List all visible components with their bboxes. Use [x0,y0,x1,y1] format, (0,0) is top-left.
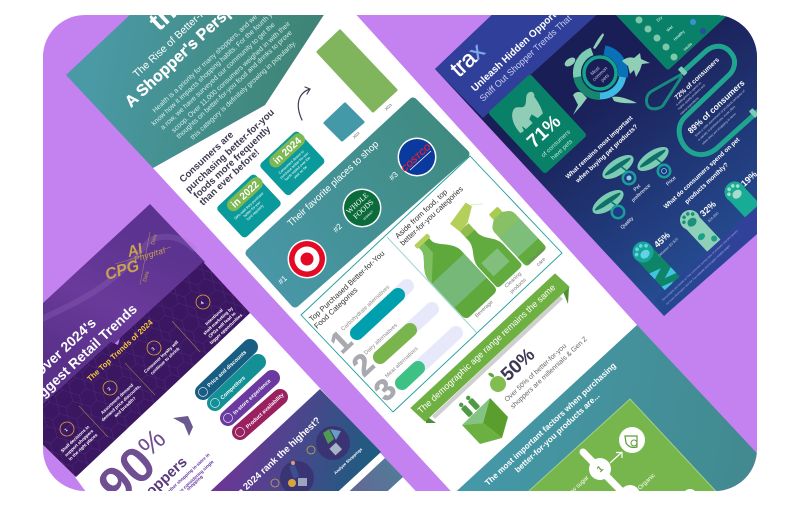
panel: favorite places to shop: #3 [387,169,400,182]
footer strip: Percentages are based on Trax consumer survey data of shoppers and pet owners [661,228,739,302]
trend 2: Assortment demand [100,382,134,415]
bar chart: purchase growth: 2023 [384,103,393,111]
trend 4: CPGs will lead to [207,311,237,339]
card: factor list: Organic [637,473,657,491]
collars: buying factors: preference [631,183,652,204]
trend 3: 3 [150,346,156,352]
leash with consumer stats: higher quality products and [677,83,706,111]
icon: teal paw 19 percent [720,177,777,236]
keyword cloud: Data [150,234,159,246]
icon: organic drop [619,427,645,453]
hero banner: scoop. Over 11,000 consumers weighed in with their [171,20,293,134]
pill list: key factors: Price and discounts [207,350,248,389]
icon: cube with people [458,394,508,444]
text: aside from food: Aside from food, top [393,188,449,240]
leash with consumer stats: when they are shopping in-store [701,112,737,146]
stat: 90 percent of shoppers [87,418,215,506]
card: in 2022: better-for-you [243,200,261,218]
keyword cloud: AI [124,240,145,261]
card: factor list: Low sugar [566,475,590,498]
keyword cloud: Data [142,271,151,283]
trend 4: shelf-marketing by [202,305,234,336]
keyword cloud: CPG [103,257,141,284]
keyword cloud [103,232,171,285]
card: in 2022: in 2022 [229,179,262,211]
keyword cloud: Phygital [133,246,167,264]
logo: Whole Foods: MARKET [362,209,374,221]
question: what matters most: What remains most important [565,114,635,180]
stat: 90 percent of shoppers: stores considering single [171,459,215,500]
trend 1: Shelf decisions in [60,424,91,453]
trend 2: and breadth? [113,395,137,418]
donut chart: most common pets [577,50,623,96]
top trends band [30,262,250,477]
card: 71 percent have pets: have pets [550,138,574,162]
leash with consumer stats: a variety of preferences, most often [697,105,736,142]
leash with consumer stats: natural ingredients [679,96,700,116]
hero banner: thoughts on better-for-you food and drinks to prove [176,29,294,140]
heading: consumers are purchasing: foods more frequently [192,124,274,201]
header banner: Sniff Out Shopper Trends That [478,13,574,103]
pill list: key factors: Competitors [220,375,247,401]
card: factor list [528,398,716,491]
panel: favorite places to shop: #2 [331,221,344,234]
panel: slate block [340,458,403,500]
hero banner [66,0,327,168]
card: in 2024: in 2024 [272,135,304,167]
hero banner: Health is a priority for many shoppers, and we [152,14,259,114]
hero banner: this category is definitely growing in popularity. [190,40,298,141]
logo: Whole Foods: WHOLE [344,190,371,216]
chart: top purchased food categories: 1 [324,324,359,360]
panel: shopper trends for pets [435,15,757,316]
logo: Target [288,240,326,278]
trend 2: 2 [106,386,112,392]
donut chart: most common pets: common [592,66,609,83]
stats: monthly spend values [652,169,759,258]
trend 4: bigger opportunities [209,312,244,345]
panel: ranked highest [201,389,381,500]
trend 2: demand price discounts, [100,383,142,422]
footer strip: for more information visit the Trax website and shopper insights pages [665,243,732,306]
header with keyword cloud: Over 2024's [31,314,99,379]
card: 71 percent have pets [492,78,583,170]
donut chart: most common pets: pets [600,73,611,84]
heading: consumers are purchasing: Consumers are [178,130,236,185]
card: in 2022: 59% said they purchase [234,191,264,221]
donut chart: most common pets: Most [589,65,602,77]
collars: buying factors: Price [665,175,678,187]
logo: Whole Foods [342,188,382,228]
stats: monthly spend values: 45% [652,230,672,250]
trend 4: Intentional [204,308,224,326]
panel: most important factors: The most important factors when purchasing [483,361,618,487]
card: top right green list [616,15,726,70]
stats: monthly spend values: 32% [698,199,718,219]
labels: category names: Personal [527,247,546,265]
trend 1 [60,422,99,462]
panel: top categories [301,156,562,412]
logo: Costco: COSTCO [399,141,433,174]
header banner: trax [445,37,490,82]
header banner [435,15,596,118]
icon: tiger paw 45 percent [628,237,686,297]
trend 1: 1 [63,427,69,433]
collars: buying factors: Pet [633,183,643,193]
collar: price [637,147,672,178]
trend 1: in the right places [68,432,99,462]
ribbon: demographic age range: The demographic age range remains the same [416,282,557,415]
top trends band: The Top Trends of 2024 [85,317,155,383]
panel: favorite places to shop [250,102,465,303]
stats: monthly spend values: 19% [739,169,759,189]
logo: Whole Foods: FOODS [351,197,375,221]
trend 3: continue to shrink [149,346,181,376]
leash with consumer stats [646,46,765,155]
stat: 50 percent: 50% [497,344,539,386]
chart: top purchased food categories: 3 [368,372,403,408]
text: aside from food: better-for-you categories [398,184,465,247]
chart: top purchased food categories: Top Purchased Better-for-You [307,249,386,323]
header with keyword cloud: Biggest Retail Trends [24,300,140,410]
heading: consumers are purchasing: purchasing better-for-you [184,107,277,195]
collar: pet preference [602,155,636,186]
leash with consumer stats: 72% of consumers [674,56,721,101]
card: top right green list: Healthy [672,29,686,42]
icon: spray bottle [450,202,522,288]
icon: shopper with cart [280,461,314,495]
stats: monthly spend values: $26-$50 [707,211,720,223]
labels: category names: Cleaning [504,271,523,289]
card: in 2024: purchase better-for-you [279,151,309,180]
icon: shopper with displays [316,426,350,460]
icon: pets silhouette [512,92,543,134]
stat: 90 percent of shoppers: whether shopping in-store in [161,452,211,499]
pill list: key factors [198,347,285,436]
trend 4: 4 [199,300,205,306]
panel: ranked highest: Analyze Shoppings [333,446,364,475]
card: in 2024: foods tripled over the [284,156,311,182]
card: in 2024: Consumers desire to [278,149,305,175]
labels: category names: Beverage [474,299,495,319]
panel: most important factors [456,325,757,491]
card: top right green list: treats [682,41,693,52]
card: 71 percent have pets: of consumers [540,129,572,159]
chart: top purchased food categories: Meat alternatives [384,346,420,379]
footer strip [655,190,790,316]
trend 3: Consumer loyalty will [143,340,179,374]
trend 1: support shoppers [64,428,95,457]
chevron [173,416,193,436]
chart: top purchased food categories: Food Categories [312,285,360,330]
stat: 50 percent: Over 50% of better-for-you [504,343,568,403]
card: in 2024: year so far [293,164,309,179]
panel: retail trends [24,204,424,506]
chart: top purchased food categories: Dairy alternatives [363,322,399,356]
stat: 90 percent of shoppers: shopping [185,474,204,492]
leash with consumer stats: Seek a wide assortment of products because of [694,89,746,138]
header with keyword cloud [24,204,205,420]
panel: favorite places to shop: Their favorite places to shop [286,139,381,229]
card: in 2022: food regularly [246,204,265,221]
heading: consumers are purchasing: than ever before! [198,147,262,208]
stats: monthly spend values: between $5-$25 [658,237,679,258]
labels: category names [474,247,547,319]
card: 71 percent have pets: 71% [523,111,565,153]
hero banner: know how it impacts shopping habits. For the fourth year [151,4,282,127]
panel: ranked highest: In 2024 rank the highest? [233,414,323,499]
stat: 50 percent: shoppers are millennials & Gen Z [510,336,589,410]
pill list: key factors: Product availability [245,392,285,430]
chart: top purchased food categories [307,249,456,408]
bar chart: purchase growth [318,31,396,140]
labels: category names: products [509,277,528,295]
chart: top purchased food categories: 2 [346,347,381,383]
arrow: upward trend [298,87,310,120]
leash with consumer stats: A willingness to spend on [675,81,703,107]
icon: spotted paw 32 percent [676,206,725,256]
pill list: key factors: In-store experience [232,378,272,416]
trend 4 [196,295,244,345]
card: top right green list: Wet [665,24,674,33]
leash with consumer stats: 89% of consumers [686,77,747,135]
card: in 2022 [217,174,281,238]
card: top right green list: Dry [655,15,663,23]
panel: favorite places to shop: #1 [276,273,289,286]
icon: apple [488,373,506,392]
collars: buying factors [592,147,676,228]
icon: beverage bottle [414,234,496,318]
card: factor list: 1 [595,463,605,474]
chart: top purchased food categories: Carbohydrate alternatives [340,284,391,332]
question: monthly spend: What do consumers spend on pet [663,136,742,210]
panel: most important factors: better-for-you products are... [513,391,602,474]
collar: quality [592,190,626,220]
hero banner: a row, we have surveyed our community to get the [160,21,277,131]
question: what matters most: when buying pet products? [574,123,640,185]
icon: personal care bottle [489,207,546,266]
labels: category names: care [536,257,547,268]
card: in 2024 [260,132,324,196]
collars: buying factors: Quality [620,215,635,231]
stat: 90 percent of shoppers: % [132,423,171,462]
bar chart: purchase growth: 2022 [352,131,361,139]
icons: pet silhouettes [563,33,650,115]
question: monthly spend: products monthly? [684,161,730,205]
